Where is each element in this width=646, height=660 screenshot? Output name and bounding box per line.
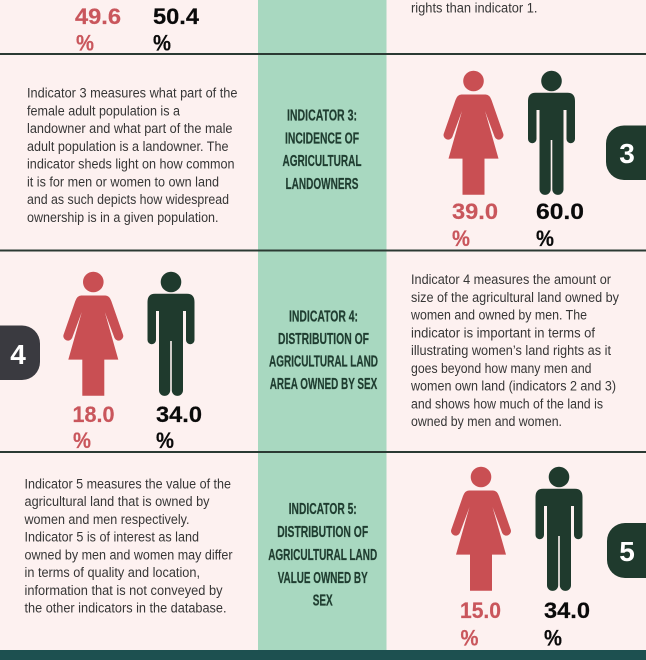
stat: men 34.0%: % [156,428,174,453]
text: indicator 4 description: women and owned by men. The [410,308,587,322]
text: indicator 3 description: adult population is a landowner. The [27,139,228,154]
panel: indicator 5 [24,467,646,650]
badge: number 5 [607,523,646,578]
text: indicator 3 description: indicator sheds light on how common [27,156,234,172]
stat: men 34.0% [544,598,590,650]
text: indicator 4 description: owned by men and women. [411,414,562,429]
text: indicator 4 description: illustrating women’s land rights as it [411,343,611,358]
text: indicator 5 description: Indicator 5 measures the value of the [24,476,231,492]
stat: women 49.6%: % [76,30,94,56]
badge: number 5: 5 [619,536,635,567]
badge: number 4: 4 [10,339,26,370]
icon: man [528,71,575,195]
icon: woman [444,71,503,195]
stat: women 39.0%: % [452,226,470,251]
heading: indicator 5: INDICATOR 5: [289,501,357,518]
badge: number 3: 3 [619,138,635,169]
centre column band [258,0,386,650]
text: end of indicator 2 description: rights than indicator 1. [411,0,538,16]
icon: man [148,272,194,396]
text: indicator 4 description: goes beyond how many men and [411,361,592,376]
stat: women 39.0%: 39.0 [452,199,498,224]
heading: indicator 4: DISTRIBUTION OF [278,331,369,348]
stat: women 18.0%: % [73,428,91,453]
stat: women 15.0%: % [460,626,478,650]
text: indicator 4 description: and shows how much of the land is [411,396,603,411]
panel: indicator 2 remainder [75,0,538,56]
stat: women 18.0% [72,402,114,453]
heading: indicator 3: LANDOWNERS [286,176,358,193]
text: indicator 4 description [410,272,619,429]
heading: indicator 3: AGRICULTURAL [282,153,362,170]
icon: woman [451,467,511,591]
heading: indicator 4 [269,309,378,393]
text: indicator 4 description: indicator is important in terms of [411,325,595,340]
text: indicator 3 description [27,86,238,225]
stat: men 50.4%: 50.4 [153,4,200,29]
stat: men 60.0%: % [536,226,554,251]
stat: women 49.6% [75,4,121,56]
text: indicator 5 description: the other indicators in the database. [24,601,226,616]
text: indicator 5 description: information that is not conveyed by [24,583,223,598]
footer band [0,650,646,660]
heading: indicator 4: AREA OWNED BY SEX [270,376,378,393]
stat: men 34.0%: 34.0 [156,402,202,427]
text: indicator 4 description: size of the agricultural land owned by [411,290,619,305]
heading: indicator 3: INDICATOR 3: [287,108,357,124]
icon: man [536,467,582,591]
text: indicator 3 description: it is for men or women to own land [27,174,219,189]
stat: men 60.0%: 60.0 [536,199,584,224]
text: indicator 3 description: female adult population is a [27,103,180,118]
text: indicator 3 description: landowner and what part of the male [27,121,232,136]
stat: women 15.0% [460,598,501,650]
stat: men 34.0% [156,402,202,453]
heading: indicator 5: SEX [313,593,333,610]
text: indicator 5 description: owned by men and women may differ [24,548,233,562]
text: indicator 4 description: women own land (indicators 2 and 3) [410,378,616,394]
stat: men 60.0% [536,199,584,251]
text: indicator 5 description: in terms of quality and location, [24,565,200,580]
stat: women 18.0%: 18.0 [72,402,114,427]
text: indicator 3 description: and as such depicts how widespread [27,192,229,207]
stat: men 34.0%: 34.0 [544,598,590,623]
text: indicator 5 description: agricultural land that is owned by [24,494,210,509]
badge: number 4 [0,326,40,380]
stat: men 50.4%: % [153,30,171,56]
text: indicator 3 description: ownership is in a given population. [27,210,218,225]
heading: indicator 4: AGRICULTURAL LAND [269,354,378,371]
heading: indicator 5 [268,501,377,610]
heading: indicator 4: INDICATOR 4: [289,309,358,326]
stat: women 15.0%: 15.0 [460,598,501,623]
stat: women 39.0% [452,199,498,251]
heading: indicator 5: DISTRIBUTION OF [277,524,368,541]
stat: men 34.0%: % [544,626,562,650]
panel: indicator 4 [0,272,619,453]
heading: indicator 5: AGRICULTURAL LAND [268,547,377,564]
stat: women 49.6%: 49.6 [75,4,121,29]
badge: number 3 [606,126,646,180]
heading: indicator 3 [282,108,362,193]
text: indicator 3 description: Indicator 3 measures what part of the [27,86,238,100]
text: indicator 5 description: women and men respectively. [24,512,190,527]
stat: men 50.4% [153,4,200,56]
heading: indicator 5: VALUE OWNED BY [278,570,368,587]
heading: indicator 3: INCIDENCE OF [285,130,359,148]
text: indicator 4 description: Indicator 4 measures the amount or [411,272,611,287]
text: indicator 5 description: Indicator 5 is of interest as land [24,530,199,545]
panel: indicator 3 [27,71,646,251]
text: indicator 5 description [24,476,233,616]
icon: woman [63,272,123,396]
